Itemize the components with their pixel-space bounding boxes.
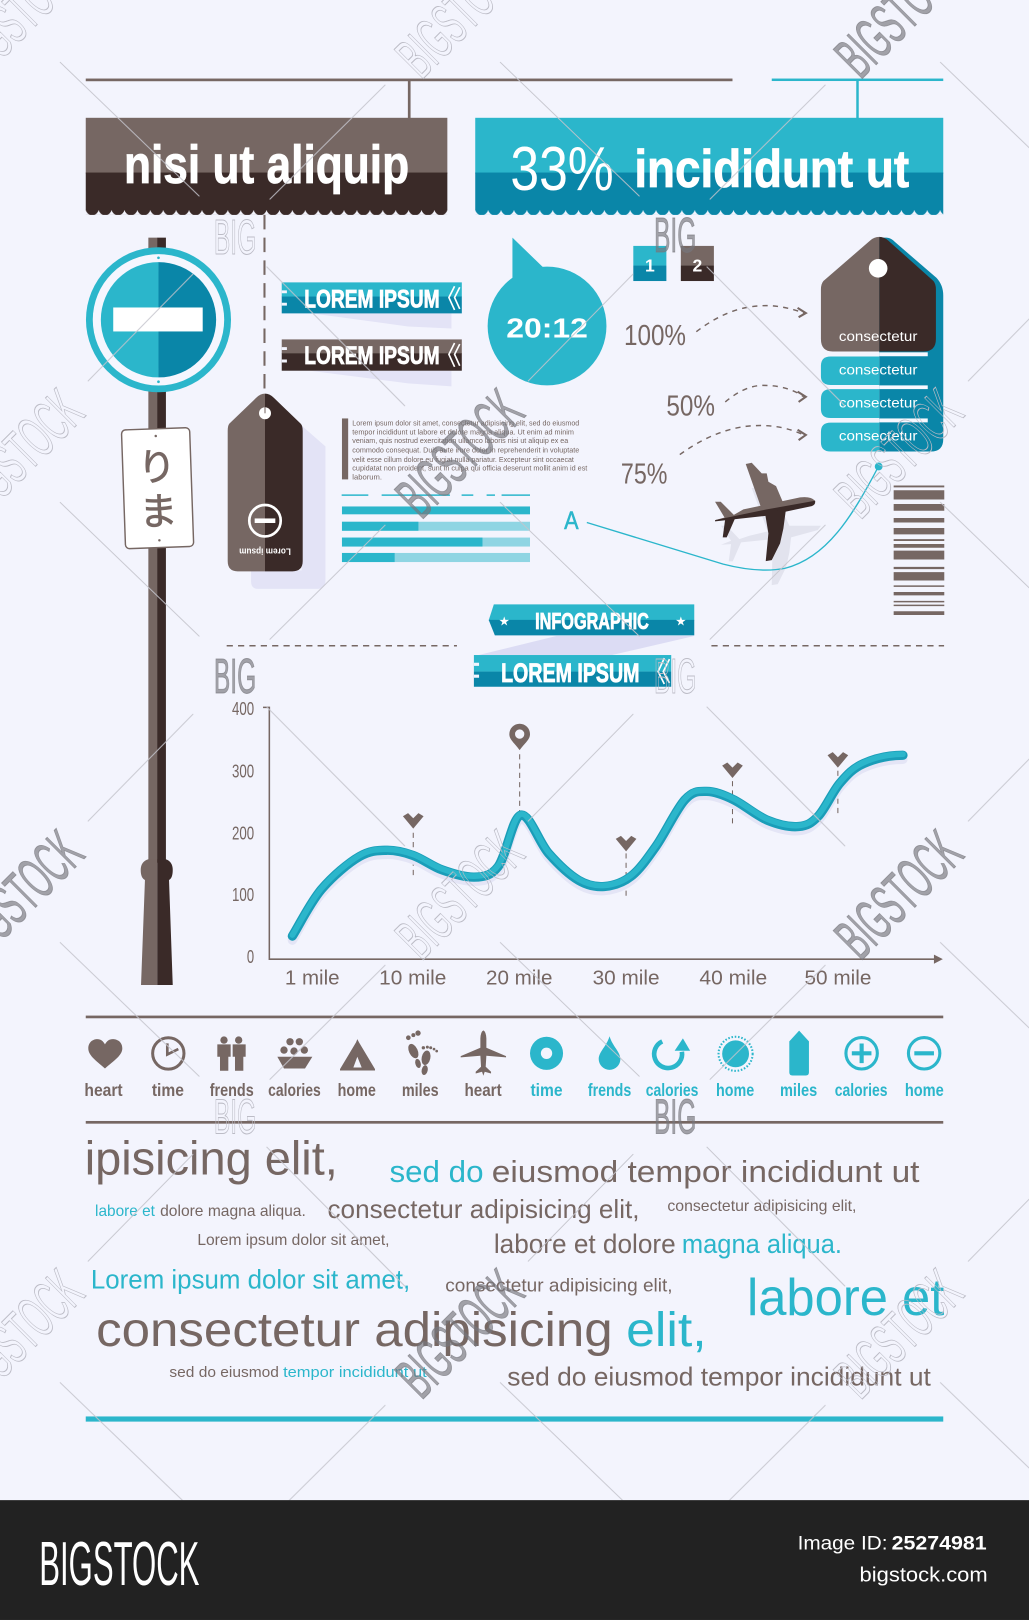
lower ribbon: lorem ipsum: LOREM IPSUM xyxy=(501,658,640,688)
lorem paragraph: laborum. xyxy=(352,472,382,481)
large price tag with list xyxy=(821,237,943,452)
x axis labels xyxy=(285,967,871,990)
icon labels: heart xyxy=(84,1080,123,1100)
brown icons xyxy=(88,1030,506,1076)
cyan hanger line xyxy=(772,79,943,119)
footer bar: Image ID: xyxy=(798,1533,887,1555)
word cloud: sed do eiusmod xyxy=(169,1365,279,1381)
lorem paragraph: veniam, quis nostrud exercitation ullamco laboris nisi ut aliquip ex ea xyxy=(352,436,569,445)
icon labels: calories xyxy=(268,1080,321,1100)
lorem paragraph xyxy=(342,418,588,481)
percentage 75% with arrow xyxy=(621,426,806,491)
word cloud: sed do xyxy=(389,1154,484,1189)
watermark BIG marks: BIG xyxy=(214,209,256,265)
airplane xyxy=(715,463,815,561)
x axis labels: 20 mile xyxy=(486,967,552,990)
footer bar: BIGSTOCK xyxy=(39,1530,199,1599)
brown ribbon: lorem ipsum: LOREM IPSUM xyxy=(304,342,440,370)
numbered box 1 xyxy=(633,246,666,281)
speech bubble with time xyxy=(488,238,606,385)
word cloud: ipisicing elit, xyxy=(85,1133,338,1186)
footer bar: bigstock.com xyxy=(860,1564,988,1587)
word cloud: labore et dolore xyxy=(494,1229,676,1259)
percentage 50% with arrow: 50% xyxy=(666,390,715,422)
word cloud: magna aliqua. xyxy=(682,1229,842,1259)
no-entry road sign xyxy=(86,247,231,392)
word cloud: eiusmod tempor incididunt ut xyxy=(492,1154,920,1189)
icon labels: time xyxy=(531,1080,563,1100)
lorem paragraph: velit esse cillum dolore eu fugiat nulla pariatur. Excepteur sint occaecat xyxy=(352,455,575,464)
icon labels: miles xyxy=(402,1080,439,1100)
text: BIG xyxy=(654,207,696,263)
sign post xyxy=(141,238,173,985)
brown title banner: nisi ut aliquip xyxy=(124,135,409,195)
word cloud: consectetur adipisicing elit, xyxy=(445,1274,673,1295)
markers xyxy=(403,724,848,851)
large price tag with list: consectetur xyxy=(839,428,918,444)
marker drop lines xyxy=(413,754,838,900)
dashed divider right xyxy=(711,645,944,647)
watermark text: BIGSTOCK xyxy=(383,377,536,530)
x axis labels: 1 mile xyxy=(285,967,340,990)
watermark BIG marks xyxy=(214,207,696,1144)
icon labels: home xyxy=(716,1080,754,1100)
icon: footprints xyxy=(406,1030,438,1076)
icon labels: calories xyxy=(835,1080,888,1100)
watermark BIG marks: BIG xyxy=(214,648,256,704)
hanging tag with minus icon: Lorem ipsum xyxy=(239,547,291,557)
icon labels: home xyxy=(905,1080,944,1100)
data curve xyxy=(292,754,903,940)
icon labels: frends xyxy=(588,1080,631,1100)
y axis labels xyxy=(232,698,254,967)
lorem paragraph: cupidatat non proident, sunt in culpa qui officia deserunt mollit anim id est xyxy=(352,464,588,473)
y axis labels: 200 xyxy=(232,822,254,843)
icon: water drop xyxy=(599,1036,620,1070)
numbered box 2: 2 xyxy=(692,256,702,276)
icon labels: home xyxy=(338,1080,376,1100)
x axis labels: 40 mile xyxy=(699,967,767,990)
cyan ribbon: lorem ipsum xyxy=(282,282,462,329)
icon: people xyxy=(217,1036,246,1071)
y axis labels: 100 xyxy=(232,884,254,905)
watermark text: BIGSTOCK xyxy=(383,818,536,971)
percentage 50% with arrow xyxy=(666,385,806,422)
icon: disc xyxy=(530,1037,563,1070)
text: BIG xyxy=(654,1088,696,1144)
route line A to pin xyxy=(564,463,883,570)
icon: airplane top view xyxy=(461,1030,506,1076)
y axis labels: 300 xyxy=(232,760,254,781)
icon labels: miles xyxy=(780,1080,817,1100)
icon: sun xyxy=(719,1037,753,1071)
large price tag with list: consectetur xyxy=(839,328,918,344)
y axis labels: 0 xyxy=(247,946,254,967)
word cloud: Lorem ipsum dolor sit amet, xyxy=(91,1264,410,1294)
lorem paragraph: tempor incididunt ut labore et dolore magna aliqua. Ut enim ad minim xyxy=(352,427,574,436)
icon labels: frends xyxy=(210,1080,254,1100)
x axis labels: 10 mile xyxy=(379,967,446,990)
route line A to pin: A xyxy=(564,508,579,535)
cyan title banner xyxy=(475,118,943,215)
numbered box 1: 1 xyxy=(645,256,655,276)
icon labels: calories xyxy=(646,1080,699,1100)
word cloud: sed do eiusmod tempor incididunt ut xyxy=(507,1363,931,1391)
barcode xyxy=(894,485,944,615)
word cloud: elit, xyxy=(626,1303,707,1357)
icon: refresh arrow xyxy=(654,1038,690,1068)
icon row bottom rule xyxy=(86,1121,943,1124)
text: BIG xyxy=(654,648,696,704)
footer bar xyxy=(0,1500,1029,1620)
infographic ribbon: INFOGRAPHIC xyxy=(535,608,649,634)
icon labels: heart xyxy=(464,1080,502,1100)
speech bubble with time: 20:12 xyxy=(506,312,588,343)
icon: minus xyxy=(908,1038,940,1069)
word cloud: tempor incididunt ut xyxy=(283,1365,427,1381)
x axis labels: 30 mile xyxy=(593,967,660,990)
cyan title banner: incididunt ut xyxy=(634,140,909,199)
japanese sign plate xyxy=(121,428,194,549)
word cloud: consectetur adipisicing elit, xyxy=(328,1196,640,1224)
brown title banner xyxy=(86,118,447,215)
icon: plus xyxy=(846,1038,877,1069)
japanese sign plate: り xyxy=(137,446,177,490)
large price tag with list: consectetur xyxy=(839,395,918,411)
watermark BIG marks: BIG xyxy=(214,1088,256,1144)
icon: tag xyxy=(789,1031,809,1076)
word cloud: labore et xyxy=(747,1268,944,1326)
icon row top rule xyxy=(86,1016,943,1018)
infographic ribbon: ★ xyxy=(675,615,686,629)
percentage 100% with arrow xyxy=(624,306,806,352)
icon: clock xyxy=(153,1038,184,1069)
icon labels: time xyxy=(152,1080,184,1100)
lorem paragraph: Lorem ipsum dolor sit amet, consectetur adipisicing elit, sed do eiusmod xyxy=(352,419,579,428)
word cloud: consectetur adipisicing xyxy=(96,1303,613,1357)
chart axes xyxy=(263,707,943,964)
horizontal bar chart xyxy=(342,495,530,562)
word cloud: consectetur adipisicing elit, xyxy=(667,1198,856,1215)
cyan icons xyxy=(530,1031,940,1076)
y axis labels: 400 xyxy=(232,698,254,719)
bottom cyan rule xyxy=(86,1416,943,1422)
footer bar: 25274981 xyxy=(892,1533,987,1555)
dashed connector xyxy=(263,215,265,388)
lorem paragraph: commodo consequat. Duis aute irure dolor in reprehenderit in voluptate xyxy=(352,445,579,454)
percentage 75% with arrow: 75% xyxy=(621,459,667,491)
word cloud: labore et xyxy=(95,1203,156,1220)
word cloud: Lorem ipsum dolor sit amet, xyxy=(197,1232,389,1249)
percentage 100% with arrow: 100% xyxy=(624,320,686,352)
watermark text: BIGSTOCK xyxy=(383,1257,536,1410)
icon: tent xyxy=(340,1039,375,1070)
infographic ribbon xyxy=(479,604,694,655)
cyan title banner: 33% xyxy=(510,135,614,204)
brown hanger line xyxy=(86,79,732,119)
word cloud xyxy=(85,1133,944,1391)
large price tag with list: consectetur xyxy=(839,362,918,378)
cyan ribbon: lorem ipsum: LOREM IPSUM xyxy=(304,285,440,313)
line chart xyxy=(232,698,943,990)
icon labels xyxy=(84,1080,944,1100)
icon: food basket xyxy=(277,1038,312,1068)
japanese sign plate: ま xyxy=(139,490,178,534)
brown ribbon: lorem ipsum xyxy=(282,339,462,386)
word cloud: dolore magna aliqua. xyxy=(160,1203,306,1220)
dashed divider left xyxy=(227,645,457,647)
airplane shadow xyxy=(721,487,821,585)
infographic ribbon: ★ xyxy=(499,615,510,629)
hanging tag with minus icon xyxy=(228,394,325,589)
x axis labels: 50 mile xyxy=(805,967,871,990)
numbered box 2 xyxy=(681,246,714,281)
icon: heart xyxy=(88,1039,122,1068)
